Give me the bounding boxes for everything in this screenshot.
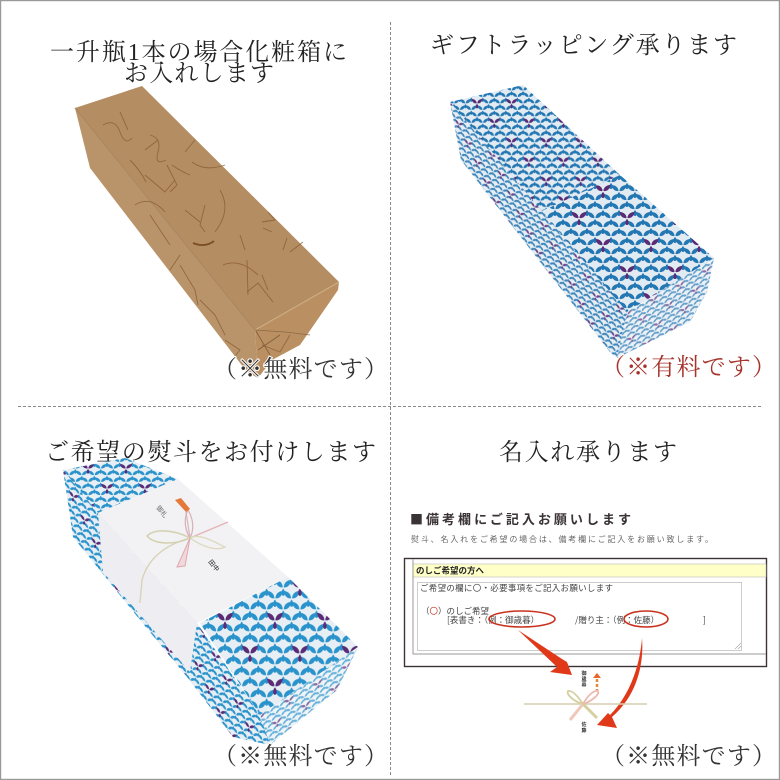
arrow: to top label xyxy=(518,630,572,675)
title: noshi: ご希望の熨斗をお付けします xyxy=(45,439,376,466)
panel: cosmetic box xyxy=(50,39,388,384)
illustration: box with noshi band xyxy=(63,458,358,745)
heading: remarks: ■備考欄にご記入お願いします xyxy=(410,509,631,528)
noshi diagram: 御 xyxy=(581,670,587,677)
title: cosmetic box xyxy=(50,39,347,87)
text: remarks instruction: 熨斗、名入れをご希望の場合は、備考欄にご記入をお願い致します。 xyxy=(411,534,713,545)
noshi diagram: 佐 xyxy=(581,721,587,728)
form screenshot xyxy=(404,558,766,666)
noshi diagram: 暮 xyxy=(581,681,587,688)
illustration: kraft paper box xyxy=(75,86,339,378)
title: name printing: 名入れ承ります xyxy=(499,439,677,466)
noshi labels: 田中 xyxy=(206,557,222,573)
price note: paid: （※有料です） xyxy=(601,347,776,382)
form screenshot: ] xyxy=(703,614,706,626)
callout: ellipses xyxy=(489,611,668,627)
form screenshot: ご希望の欄に〇・必要事項をご記入お願いします xyxy=(420,582,613,594)
title: cosmetic box: お入れします xyxy=(124,61,274,87)
illustration: blue patterned box xyxy=(450,85,714,358)
panel: name printing xyxy=(404,439,776,771)
form screenshot: /贈り主：（例：佐藤） xyxy=(575,614,659,626)
arrow: to bottom label xyxy=(597,638,642,728)
noshi band xyxy=(98,479,288,672)
form screenshot: のしご希望の方へ xyxy=(416,564,485,576)
panel: gift wrapping xyxy=(430,32,776,382)
noshi diagram xyxy=(524,670,647,734)
form screenshot: （〇）のしご希望 xyxy=(421,605,490,617)
noshi diagram: 歳 xyxy=(581,676,587,682)
price note: free: （※無料です） xyxy=(213,736,388,771)
panel: noshi xyxy=(45,439,388,771)
noshi labels: 御礼 xyxy=(154,503,171,520)
noshi diagram: 藤 xyxy=(581,727,587,734)
price note: free: （※無料です） xyxy=(213,349,388,384)
title: cosmetic box: 一升瓶1本の場合化粧箱に xyxy=(50,39,347,66)
price note: free: （※無料です） xyxy=(601,736,776,771)
noshi labels xyxy=(154,503,222,573)
title: gift wrapping: ギフトラッピング承ります xyxy=(430,32,737,59)
form screenshot: [表書き：（例：御歳暮） xyxy=(447,614,539,626)
